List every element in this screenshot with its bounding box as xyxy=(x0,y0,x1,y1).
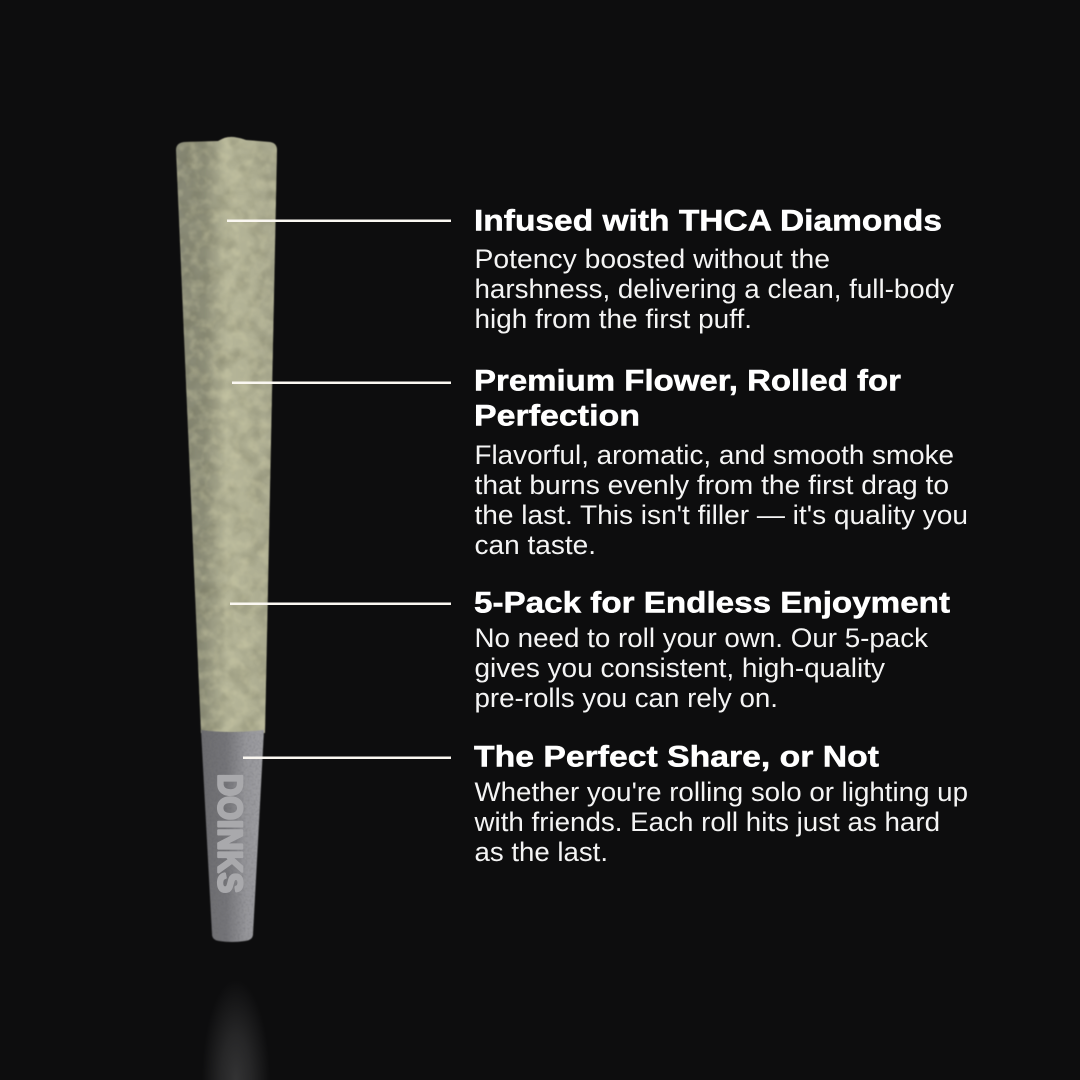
description: harshness, delivering a clean, full-body xyxy=(474,274,955,304)
description xyxy=(474,440,968,560)
heading: The Perfect Share, or Not xyxy=(474,740,879,774)
feature: THCA diamonds xyxy=(474,204,955,334)
flower body of the cone xyxy=(176,137,277,733)
heading xyxy=(474,364,901,432)
brand mark on filter: DOINKS xyxy=(210,774,248,893)
description: No need to roll your own. Our 5-pack xyxy=(474,623,929,653)
heading: Perfection xyxy=(474,400,640,432)
description: Potency boosted without the xyxy=(474,244,830,274)
callout line: THCA diamonds xyxy=(227,220,451,222)
feature: premium flower xyxy=(474,364,968,560)
callout line: 5-pack xyxy=(230,602,451,605)
description: the last. This isn't filler — it's quality you xyxy=(474,500,968,530)
description: Whether you're rolling solo or lighting up xyxy=(474,777,968,807)
heading: Infused with THCA Diamonds xyxy=(474,204,942,238)
description: that burns evenly from the first drag to xyxy=(474,470,949,500)
description xyxy=(473,777,968,867)
description: as the last. xyxy=(474,837,608,867)
description: with friends. Each roll hits just as hard xyxy=(473,807,940,837)
description xyxy=(474,244,955,334)
heading: 5-Pack for Endless Enjoyment xyxy=(474,586,950,620)
feature: 5-pack xyxy=(474,586,950,713)
reflection under the pre-roll xyxy=(200,978,272,1080)
description: pre-rolls you can rely on. xyxy=(474,683,778,713)
description xyxy=(474,623,929,713)
description: high from the first puff. xyxy=(474,304,752,334)
description: gives you consistent, high-quality xyxy=(474,653,886,683)
pre-roll illustration xyxy=(176,137,277,942)
heading: Premium Flower, Rolled for xyxy=(474,364,901,398)
callout line: perfect share xyxy=(243,756,451,759)
paper filter tip xyxy=(201,730,264,942)
description: Flavorful, aromatic, and smooth smoke xyxy=(474,440,954,470)
callout line: premium flower xyxy=(232,382,451,384)
feature: perfect share xyxy=(473,740,968,867)
description: can taste. xyxy=(474,530,596,560)
